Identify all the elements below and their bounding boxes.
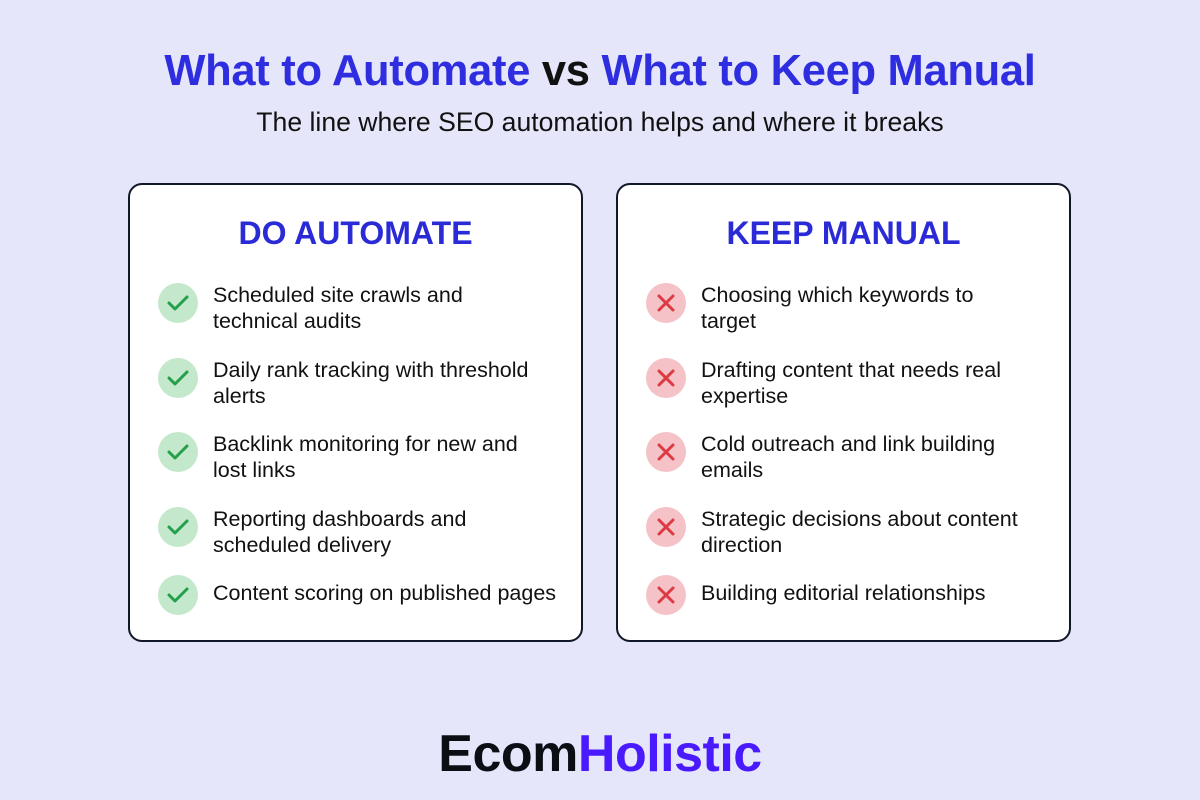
item 5: Building editorial relationships — [701, 581, 985, 605]
item 2 — [158, 358, 528, 408]
item 3 — [158, 432, 518, 482]
item 3: lost links — [213, 458, 295, 482]
item 2 — [646, 358, 1001, 408]
item 5: Content scoring on published pages — [213, 581, 556, 605]
title: What to Automate vs What to Keep Manual — [164, 47, 1036, 95]
item 4: Strategic decisions about content — [701, 507, 1018, 531]
item 3: emails — [701, 458, 763, 482]
logo: EcomHolistic — [438, 725, 762, 783]
item 4: Reporting dashboards and — [213, 507, 466, 531]
item 1 — [158, 283, 463, 333]
item 1: target — [701, 309, 756, 333]
item 4 — [646, 507, 1018, 557]
item 4 — [158, 507, 466, 557]
item 2: expertise — [701, 384, 788, 408]
subtitle: The line where SEO automation helps and where it breaks — [256, 107, 944, 137]
item 2: alerts — [213, 384, 266, 408]
heading: keep manual: KEEP MANUAL — [726, 215, 961, 251]
item 4: direction — [701, 533, 782, 557]
item 1: Choosing which keywords to — [701, 283, 973, 307]
item 5 — [646, 575, 985, 615]
item 3: Cold outreach and link building — [701, 432, 995, 456]
item 1: technical audits — [213, 309, 361, 333]
item 3 — [646, 432, 995, 482]
item 4: scheduled delivery — [213, 533, 391, 557]
item 5 — [158, 575, 556, 615]
item 1: Scheduled site crawls and — [213, 283, 463, 307]
item 2: Drafting content that needs real — [701, 358, 1001, 382]
item 2: Daily rank tracking with threshold — [213, 358, 528, 382]
panel: do automate — [128, 183, 583, 642]
heading: do automate: DO AUTOMATE — [238, 215, 473, 251]
item 1 — [646, 283, 973, 333]
panel: keep manual — [616, 183, 1071, 642]
item 3: Backlink monitoring for new and — [213, 432, 518, 456]
